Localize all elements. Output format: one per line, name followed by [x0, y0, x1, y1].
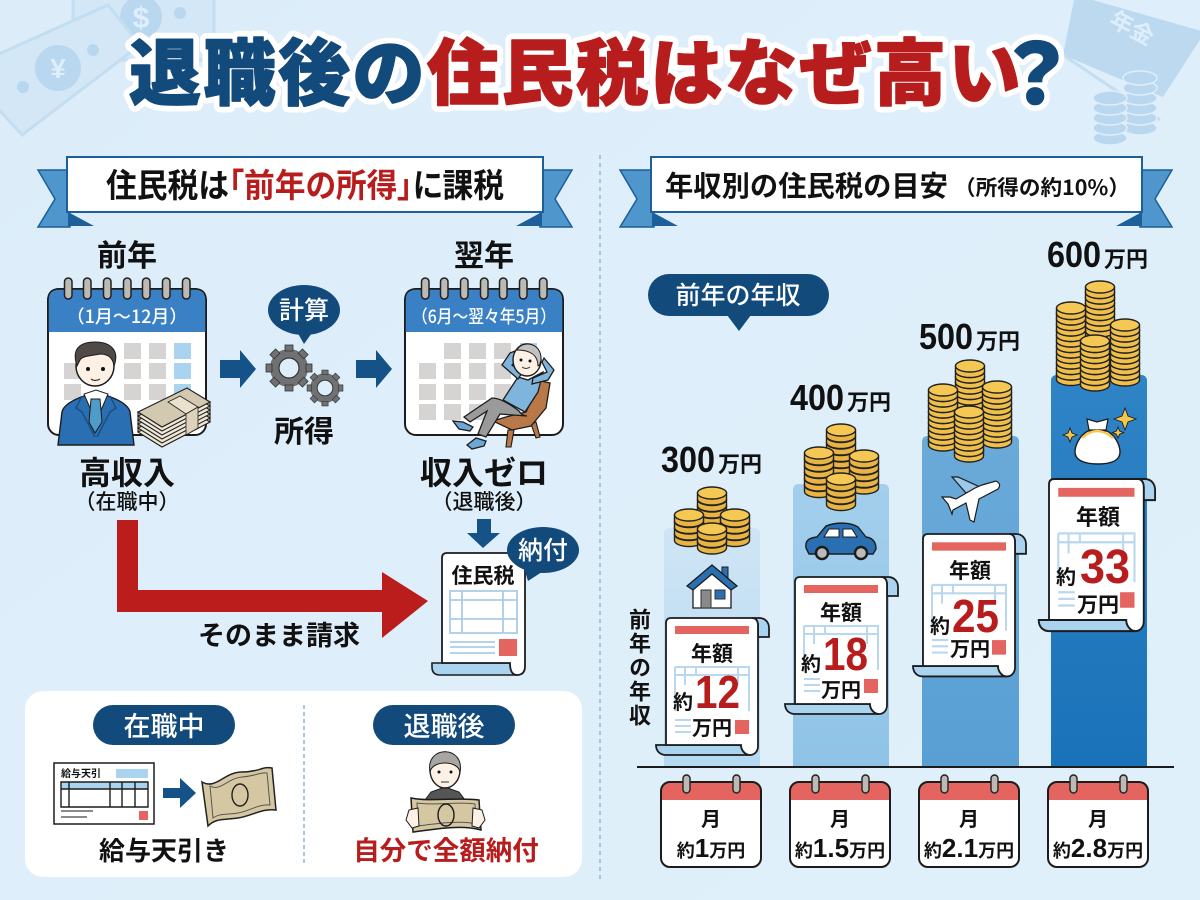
illustration: working man — [58, 342, 134, 445]
scroll: annual tax 33: 年額 — [1076, 500, 1120, 532]
bar: 400万円 — [793, 484, 889, 767]
calendar: monthly 2.8 — [1048, 775, 1148, 867]
label: 400万円: 万円 — [847, 385, 891, 417]
left section ribbon heading: 住民税は「前年の所得」に課税 — [106, 159, 504, 207]
left section ribbon heading — [38, 157, 572, 227]
scroll: annual tax 18: 約 — [801, 648, 821, 677]
decoration: banknotes — [0, 0, 214, 135]
speech bubble: payment: 納付 — [518, 531, 568, 567]
heading: zero income: （退職後） — [432, 486, 536, 516]
right section ribbon heading: （所得の約10%） — [954, 172, 1130, 202]
calendar: monthly 2.1 — [919, 775, 1019, 867]
label: 400万円: 400 — [790, 377, 844, 418]
speech bubble: calculation: 計算 — [279, 291, 329, 327]
scroll: annual tax 25: 万円 — [950, 633, 990, 662]
label: 300万円: 300 — [661, 439, 715, 480]
calendar: monthly 2.1: 約2.1万円 — [924, 833, 1014, 863]
heading: income high — [74, 448, 180, 516]
scroll: annual tax 18: 年額 — [820, 597, 862, 627]
scroll: annual tax 18: 万円 — [821, 674, 861, 703]
bar: 500万円 — [922, 436, 1019, 767]
bar: 600万円 — [1051, 375, 1147, 767]
scroll: annual tax 25: 約 — [930, 610, 950, 639]
callout: previous annual income: 前年の年収 — [675, 276, 801, 312]
label: 600万円: 万円 — [1104, 242, 1148, 274]
text: salary deduction: 給与天引き — [99, 831, 229, 868]
title: 退職後の住民税はなぜ高い — [129, 15, 1023, 120]
icon: coins — [1056, 281, 1140, 391]
heading: zero income: 収入ゼロ — [420, 448, 548, 494]
scroll: annual tax 12: 約 — [673, 686, 693, 715]
calendar: monthly 1 — [661, 775, 761, 867]
scroll: annual tax 12: 12 — [695, 666, 740, 718]
icon: pay slip: 給与天引 — [61, 765, 101, 780]
heading: previous year: 前年 — [97, 231, 157, 275]
document: resident tax notice — [432, 553, 525, 675]
pill: retired: 退職後 — [404, 705, 484, 744]
right section ribbon heading — [620, 157, 1172, 227]
scroll: annual tax 33: 万円 — [1077, 589, 1119, 619]
decoration: banknotes: $ — [133, 2, 150, 35]
calendar: monthly 1.5: 約1.5万円 — [795, 833, 885, 863]
scroll: annual tax 12: 年額 — [691, 638, 733, 668]
panel: payment method comparison — [25, 691, 582, 877]
pill: employed: 在職中 — [124, 705, 204, 744]
scroll: annual tax 25: 25 — [952, 590, 999, 642]
calendar: previous year — [48, 278, 206, 435]
calendar: monthly 1.5: 月 — [830, 803, 850, 832]
icon: money bag and sparkles — [1063, 408, 1136, 464]
scroll: annual tax 25 — [913, 534, 1026, 676]
calendar: monthly 2.8: 約2.8万円 — [1053, 833, 1143, 863]
arrow: billed as is — [117, 520, 428, 638]
right section ribbon heading: 年収別の住民税の目安 — [665, 164, 948, 205]
heading: income high: （在職中） — [74, 486, 180, 516]
title: 退職後の住民税はなぜ高い — [129, 15, 1023, 120]
document: resident tax notice: 住民税 — [452, 560, 514, 590]
scroll: annual tax 12 — [656, 618, 769, 755]
label: 400万円 — [790, 377, 891, 418]
illustration: relaxing retiree in chair — [453, 344, 554, 449]
column: 600万円 — [1039, 234, 1155, 867]
calendar: next year — [405, 278, 563, 435]
icon: coins — [804, 424, 878, 510]
icon: pay slip — [54, 763, 154, 824]
baseline axis — [637, 766, 1174, 768]
pill: employed — [93, 705, 235, 745]
heading: income high: 高収入 — [79, 448, 175, 494]
decoration: banknotes: ¥ — [50, 53, 66, 84]
pill: retired — [373, 705, 515, 745]
center divider — [599, 155, 601, 880]
calendar: monthly 2.1: 月 — [959, 803, 979, 832]
speech bubble: calculation — [268, 285, 340, 344]
icon: gears — [266, 345, 343, 406]
calendar: monthly 1.5 — [790, 775, 890, 867]
icon: coins — [674, 487, 750, 554]
text: billed as is: そのまま請求 — [198, 614, 360, 653]
scroll: annual tax 33: 約 — [1056, 561, 1076, 590]
label: 300万円: 万円 — [718, 447, 762, 479]
arrow: to next year — [356, 350, 392, 388]
column: 300万円 — [656, 439, 769, 867]
column: 400万円 — [785, 377, 898, 867]
label: 600万円 — [1047, 234, 1148, 275]
title: ？ — [995, 8, 1080, 127]
speech bubble: payment — [507, 527, 579, 581]
calendar: previous year: （1月〜12月） — [67, 303, 187, 329]
calendar: monthly 1: 月 — [701, 803, 721, 832]
axis label: 前年の年収 — [624, 608, 656, 728]
arrow: down to tax bill — [467, 519, 500, 548]
scroll: annual tax 25: 年額 — [949, 555, 991, 585]
decoration: pension card and coins — [1063, 0, 1200, 145]
title: ？ — [995, 8, 1080, 127]
decoration: pension card and coins: 年金 — [1105, 0, 1161, 52]
arrow: to income — [220, 350, 256, 388]
scroll: annual tax 33: 33 — [1080, 541, 1130, 594]
arrow: payslip to bill — [163, 778, 196, 808]
label: 500万円: 500 — [919, 316, 973, 357]
text: pay in full yourself: 自分で全額納付 — [353, 829, 539, 868]
scroll: annual tax 33 — [1039, 479, 1155, 631]
label: 500万円: 万円 — [976, 324, 1020, 356]
scroll: annual tax 18 — [785, 577, 898, 714]
label: 300万円 — [661, 439, 762, 480]
heading: next year: 翌年 — [454, 231, 514, 275]
icon: coins — [928, 360, 1012, 462]
column: 500万円 — [913, 316, 1026, 867]
scroll: annual tax 12: 万円 — [692, 712, 732, 741]
label: 500万円 — [919, 316, 1020, 357]
icon: car — [806, 523, 876, 559]
heading: zero income — [420, 448, 548, 516]
icon: banknote — [202, 768, 276, 826]
label: 600万円: 600 — [1047, 234, 1101, 275]
bar chart — [664, 375, 1147, 767]
illustration: retiree holding banknote — [406, 752, 485, 832]
illustration: stack of bills — [138, 388, 210, 447]
calendar: monthly 1: 約1万円 — [677, 833, 745, 863]
icon: house — [687, 565, 737, 608]
callout: previous annual income — [648, 274, 829, 331]
scroll: annual tax 18: 18 — [823, 628, 868, 680]
heading: income: 所得 — [274, 407, 334, 451]
calendar: monthly 2.8: 月 — [1088, 803, 1108, 832]
icon: airplane — [942, 477, 1000, 522]
calendar: next year: （6月〜翌々年5月） — [412, 303, 556, 329]
bar: 300万円 — [664, 528, 760, 767]
